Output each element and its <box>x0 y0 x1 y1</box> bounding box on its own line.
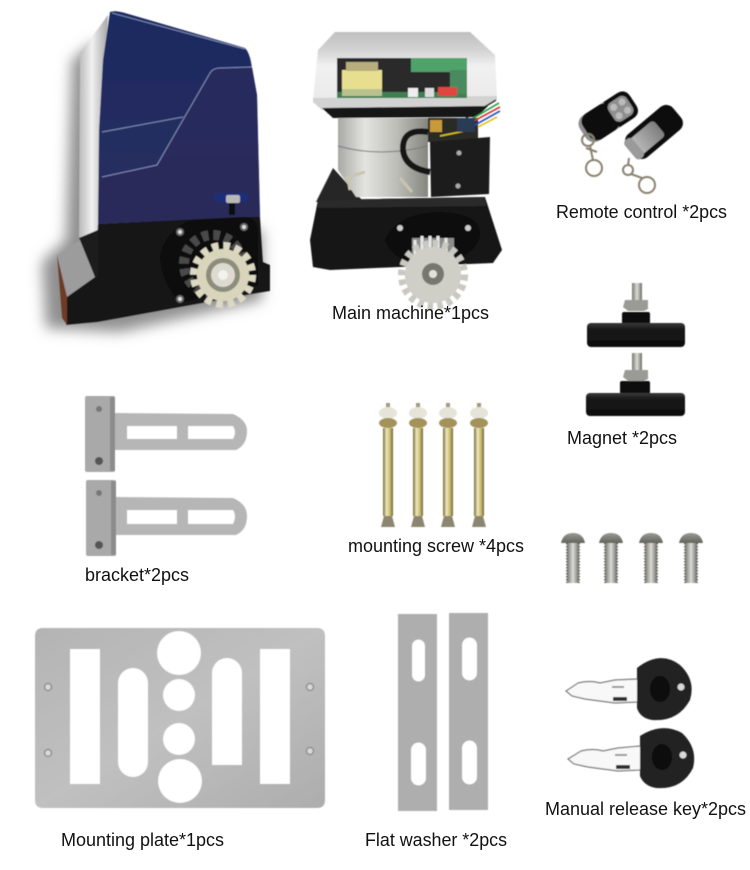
label: remote control: Remote control *2pcs <box>556 202 727 222</box>
motor drum <box>338 118 428 197</box>
label: magnet: Magnet *2pcs <box>567 428 677 448</box>
screw 4 <box>470 403 488 527</box>
circuit board <box>337 58 467 98</box>
silver foot wedge <box>57 240 95 297</box>
product: button-head bolts <box>561 533 703 583</box>
silver side panel <box>79 15 108 238</box>
remote left <box>575 88 641 146</box>
washer right <box>449 613 488 810</box>
product: mounting screws <box>379 403 488 527</box>
gear <box>184 235 252 304</box>
product: main machine with clear cover <box>310 32 502 306</box>
magnet lower <box>586 353 685 416</box>
product: mounting plate <box>35 628 325 808</box>
product: main machine with blue cover <box>42 11 270 332</box>
clear dome <box>313 32 497 117</box>
gear <box>402 236 464 306</box>
label: bracket: bracket*2pcs <box>85 565 189 585</box>
product: remote controls <box>575 88 687 193</box>
bracket lower <box>115 497 247 535</box>
key upper <box>566 658 692 720</box>
label: main machine: Main machine*1pcs <box>332 303 489 323</box>
gear plate <box>385 212 480 263</box>
release lever <box>214 193 248 215</box>
screw 3 <box>439 403 457 527</box>
key rings <box>582 134 655 193</box>
red side of foot <box>57 255 67 325</box>
wiring clutter under dome <box>428 118 478 142</box>
bolt 3 <box>639 533 663 583</box>
motor ribs and feet <box>338 146 428 192</box>
blue cover <box>98 11 260 224</box>
bolt 4 <box>679 533 703 583</box>
key lower <box>568 728 694 788</box>
wire bundle <box>440 100 500 136</box>
screw 2 <box>409 403 427 527</box>
label: mounting screw: mounting screw *4pcs <box>348 536 524 556</box>
label: flat washer: Flat washer *2pcs <box>365 830 507 850</box>
magnet upper <box>587 283 685 347</box>
bolt 1 <box>561 533 585 583</box>
gear mounting plate <box>160 217 258 303</box>
control box <box>430 137 490 197</box>
washer left <box>398 614 437 811</box>
black gearbox base <box>66 217 270 325</box>
bracket upper <box>115 413 247 450</box>
black gearbox <box>310 197 502 270</box>
product: flat washers <box>398 613 488 811</box>
label: manual release key: Manual release key*2pcs <box>545 799 746 819</box>
screw 1 <box>379 403 397 527</box>
product: magnets <box>586 283 685 416</box>
plate screws <box>177 224 247 302</box>
remote right <box>621 101 687 163</box>
label: mounting plate: Mounting plate*1pcs <box>61 830 224 850</box>
product: brackets <box>85 396 247 556</box>
plate rivets <box>44 684 314 756</box>
product: manual release keys <box>566 658 694 788</box>
drop shadow <box>42 40 262 332</box>
bolt 2 <box>599 533 623 583</box>
black mount behind motor <box>316 168 362 202</box>
motor cable <box>403 131 430 172</box>
